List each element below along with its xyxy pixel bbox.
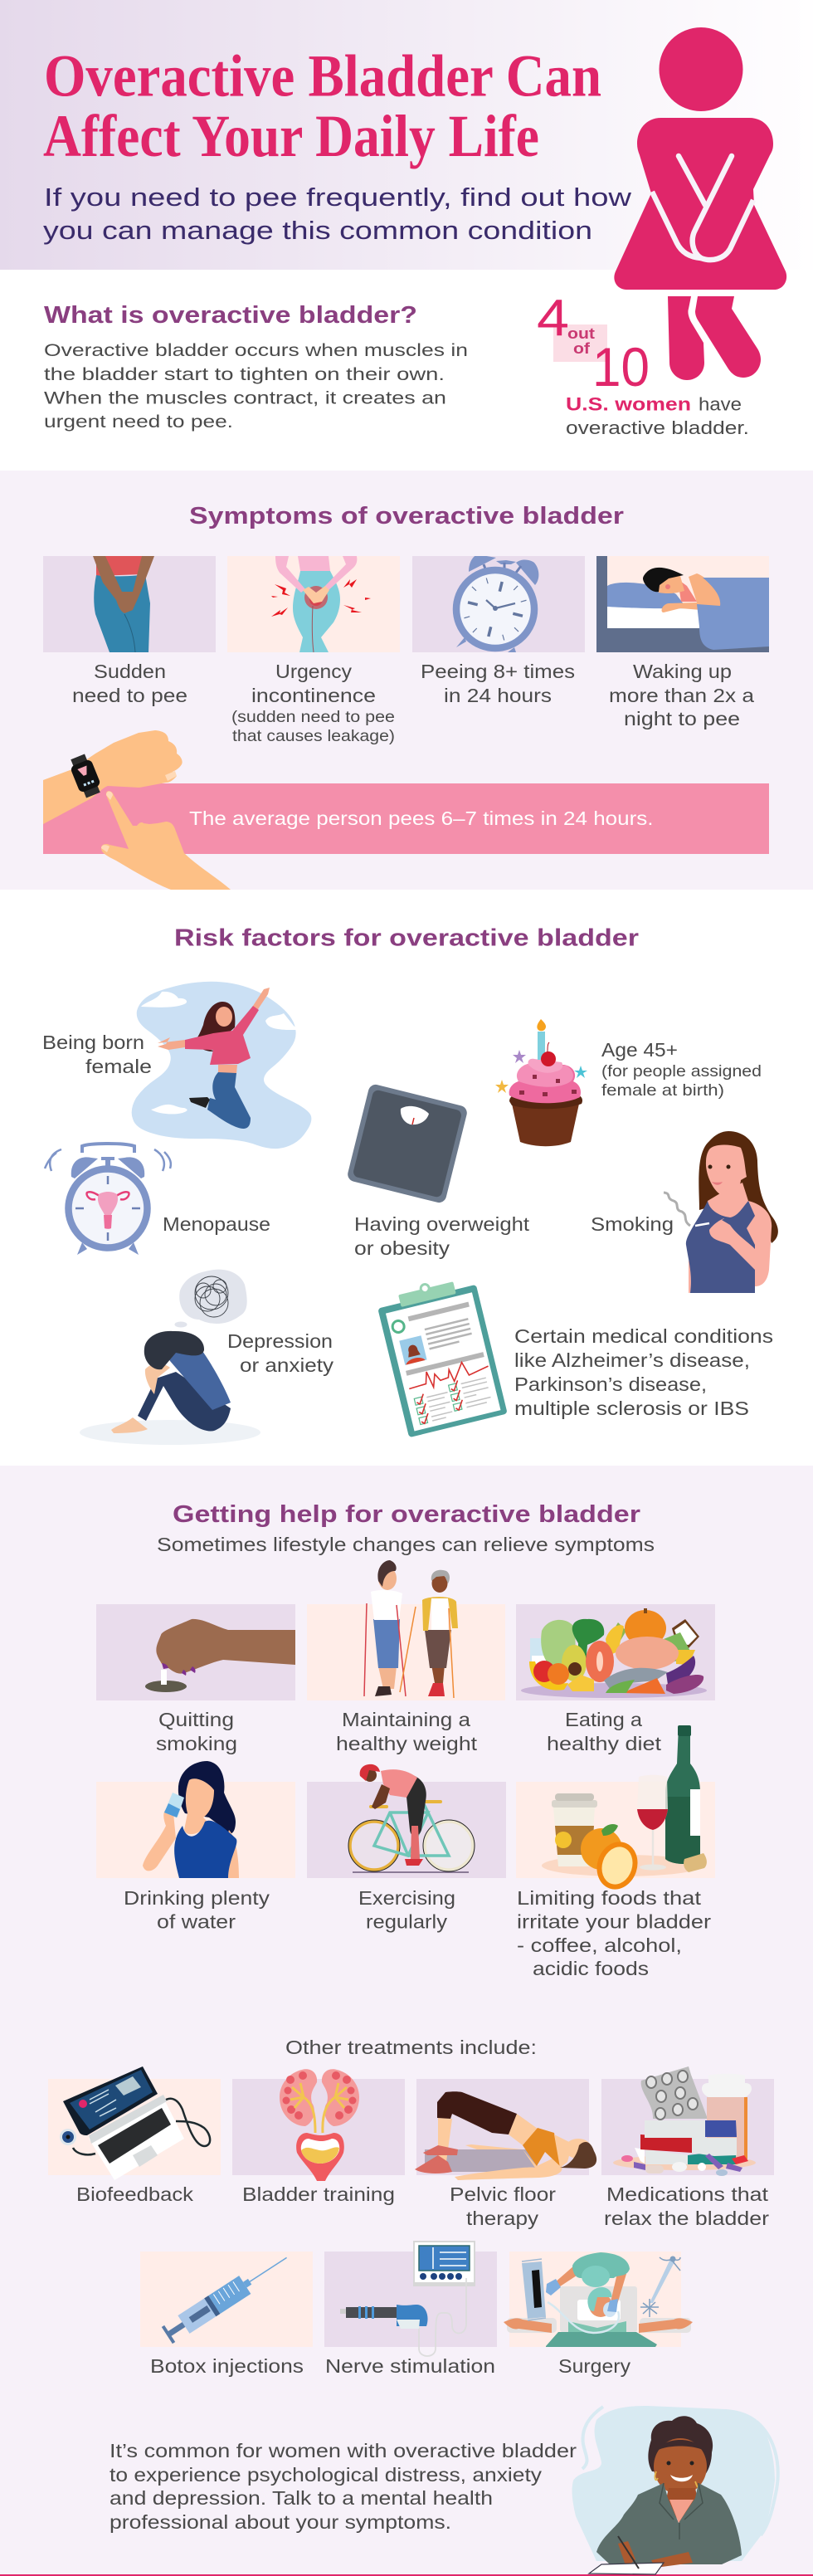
panel: drinking plenty of water (96, 1761, 295, 1878)
label: urgency incontinence: Urgency (275, 661, 353, 682)
label: exercising regularly (358, 1887, 455, 1932)
panel: botox injections (140, 2249, 313, 2347)
getting help section background (0, 1466, 813, 2576)
label: age 45+: (for people assigned (601, 1062, 762, 1081)
panel: exercising regularly (307, 1764, 506, 1878)
symptoms section background (0, 471, 813, 890)
label: eating a healthy diet: healthy diet (547, 1733, 662, 1754)
label: eating a healthy diet (547, 1709, 662, 1754)
label: waking up at night: Waking up (633, 661, 732, 682)
what is overactive bladder heading: What is overactive bladder? (44, 302, 417, 329)
label: limiting foods: irritate your bladder (517, 1910, 711, 1932)
label: pelvic floor therapy: therapy (466, 2208, 539, 2229)
callout: average person (43, 783, 769, 854)
panel: pelvic floor therapy (415, 2079, 596, 2180)
label: limiting foods: - coffee, alcohol, (517, 1934, 682, 1956)
label: certain medical conditions: like Alzheimer’s disease, (514, 1349, 750, 1371)
label: depression or anxiety: Depression (227, 1330, 333, 1352)
label: exercising regularly: regularly (366, 1910, 448, 1932)
definition text: urgent need to pee. (44, 412, 233, 432)
label: age 45+: Age 45+ (601, 1039, 678, 1061)
label: drinking plenty of water (124, 1887, 270, 1932)
panel: surgery (504, 2252, 693, 2347)
label: maintaining a healthy weight: Maintaining a (342, 1709, 470, 1730)
label: urgency incontinence: incontinence (251, 685, 376, 706)
icon: clipboard with medical chart (375, 1272, 508, 1437)
panel: maintaining a healthy weight (307, 1560, 505, 1700)
label: having overweight or obesity: Having overweight (354, 1213, 530, 1235)
label: nerve stimulation: Nerve stimulation (325, 2355, 495, 2377)
definition text: Overactive bladder occurs when muscles in (44, 340, 468, 360)
label: being born female (42, 1032, 152, 1077)
label: exercising regularly: Exercising (358, 1887, 455, 1909)
label: medications (604, 2183, 769, 2229)
closing text about psychological distress: to experience psychological distress, anxiety (110, 2464, 543, 2486)
closing text about psychological distress: and depression. Talk to a mental health (110, 2487, 493, 2509)
icon: alarm clock with uterus (45, 1144, 171, 1255)
label: depression or anxiety (227, 1330, 334, 1376)
icon: weighing scale (346, 1083, 469, 1204)
bottom rule (0, 2574, 813, 2576)
closing text about psychological distress: It’s common for women with overactive bladder (110, 2440, 577, 2461)
label: peeing 8+ times: in 24 hours (444, 685, 552, 706)
label: biofeedback: Biofeedback (76, 2183, 194, 2205)
illustration: mental health professional (572, 2406, 778, 2574)
label: limiting foods (517, 1887, 711, 1979)
label: urgency incontinence: that causes leakage) (232, 727, 395, 745)
panel: eating a healthy diet (516, 1604, 715, 1700)
panel: nerve stimulation (324, 2241, 497, 2356)
illustration: woman jumping against sky (132, 982, 311, 1149)
label: peeing 8+ times: Peeing 8+ times (421, 661, 575, 682)
label: quitting smoking (156, 1709, 237, 1754)
symptoms heading: Symptoms of overactive bladder (189, 503, 624, 529)
label: surgery: Surgery (558, 2355, 631, 2377)
label: waking up at night (609, 661, 754, 729)
label: being born female: female (85, 1056, 152, 1077)
panel: sudden need to pee (43, 556, 216, 652)
statistic: 4 out of 10: 10 (592, 336, 650, 398)
icon: hand with smartwatch (43, 730, 231, 890)
label: menopause: Menopause (163, 1213, 270, 1235)
panel: limiting irritating foods and drinks (516, 1725, 715, 1895)
label: drinking plenty of water: Drinking plenty (124, 1887, 270, 1909)
label: waking up at night: more than 2x a (609, 685, 754, 706)
label: peeing 8+ times (421, 661, 575, 706)
panel: urgency incontinence (227, 556, 400, 652)
subtitle (43, 183, 632, 245)
label: smoking: Smoking (591, 1213, 674, 1235)
statistic: 4 out of 10: 4 (537, 290, 569, 347)
label: sudden need to pee: need to pee (72, 685, 187, 706)
icon: woman needing to pee (614, 27, 786, 380)
label: waking up at night: night to pee (624, 708, 740, 729)
title: Overactive Bladder Can (44, 43, 601, 110)
label: pelvic floor therapy (450, 2183, 556, 2229)
panel: biofeedback (48, 2066, 221, 2180)
statistic: 4 out of 10: overactive bladder. (566, 417, 749, 438)
label: bladder training: Bladder training (242, 2183, 395, 2205)
label: age 45+ (601, 1039, 762, 1100)
label: limiting foods: Limiting foods that (517, 1887, 702, 1909)
definition text: the bladder start to tighten on their own. (44, 364, 445, 384)
subtitle: If you need to pee frequently, find out how (44, 183, 632, 212)
label: botox injections: Botox injections (150, 2355, 304, 2377)
panel: medications (601, 2066, 774, 2176)
label: limiting foods: acidic foods (533, 1958, 649, 1979)
label: certain medical conditions: Certain medical conditions (514, 1325, 773, 1347)
label: depression or anxiety: or anxiety (240, 1354, 334, 1376)
label: pelvic floor therapy: Pelvic floor (450, 2183, 556, 2205)
label: medications: Medications that (606, 2183, 769, 2205)
label: sudden need to pee (72, 661, 187, 706)
panel: waking up at night in bed (596, 556, 769, 652)
icon: cupcake (495, 1019, 587, 1146)
risk factors heading: Risk factors for overactive bladder (174, 925, 639, 951)
label: maintaining a healthy weight (336, 1709, 478, 1754)
label: quitting smoking: smoking (156, 1733, 237, 1754)
header band (0, 0, 813, 270)
definition text: When the muscles contract, it creates an (44, 388, 446, 408)
label: urgency incontinence: (sudden need to pee (231, 708, 395, 726)
label: quitting smoking: Quitting (158, 1709, 234, 1730)
title (43, 43, 601, 169)
illustration: woman smoking (664, 1131, 778, 1293)
panel: peeing 8+ times alarm clock (412, 554, 585, 652)
label: certain medical conditions: multiple sclerosis or IBS (514, 1398, 749, 1419)
label: being born female: Being born (42, 1032, 144, 1053)
definition text (44, 340, 468, 432)
statistic: 4 out of 10: U.S. women (566, 393, 691, 415)
closing text about psychological distress: professional about your symptoms. (110, 2511, 451, 2533)
statistic: 4 out of 10: out (567, 325, 595, 342)
label: drinking plenty of water: of water (157, 1910, 236, 1932)
label: sudden need to pee: Sudden (94, 661, 166, 682)
label: certain medical conditions: Parkinson’s disease, (514, 1373, 707, 1395)
subtitle: you can manage this common condition (43, 216, 592, 245)
callout: average person: The average person pees 6–7 times in 24 hours. (189, 807, 654, 829)
closing text about psychological distress (110, 2440, 577, 2533)
panel: quitting smoking (96, 1604, 295, 1700)
label: age 45+: female at birth) (601, 1081, 724, 1100)
statistic: 4 out of 10: have (699, 393, 742, 415)
label: eating a healthy diet: Eating a (565, 1709, 642, 1730)
label: medications: relax the bladder (604, 2208, 769, 2229)
getting help heading: Getting help for overactive bladder (173, 1501, 640, 1528)
label: urgency incontinence (231, 661, 395, 745)
title: Affect Your Daily Life (43, 103, 539, 169)
statistic: 4 out of 10: of (573, 340, 591, 357)
getting help subtitle: Sometimes lifestyle changes can relieve symptoms (157, 1534, 655, 1555)
illustration: depressed person with thought cloud (80, 1270, 260, 1445)
label: certain medical conditions (514, 1325, 773, 1419)
label: having overweight or obesity (354, 1213, 530, 1259)
panel: bladder training (232, 2069, 405, 2181)
label: having overweight or obesity: or obesity (354, 1237, 450, 1259)
other treatments heading: Other treatments include: (285, 2037, 537, 2058)
statistic: 4 out of 10 (537, 290, 749, 438)
label: maintaining a healthy weight: healthy weight (336, 1733, 478, 1754)
